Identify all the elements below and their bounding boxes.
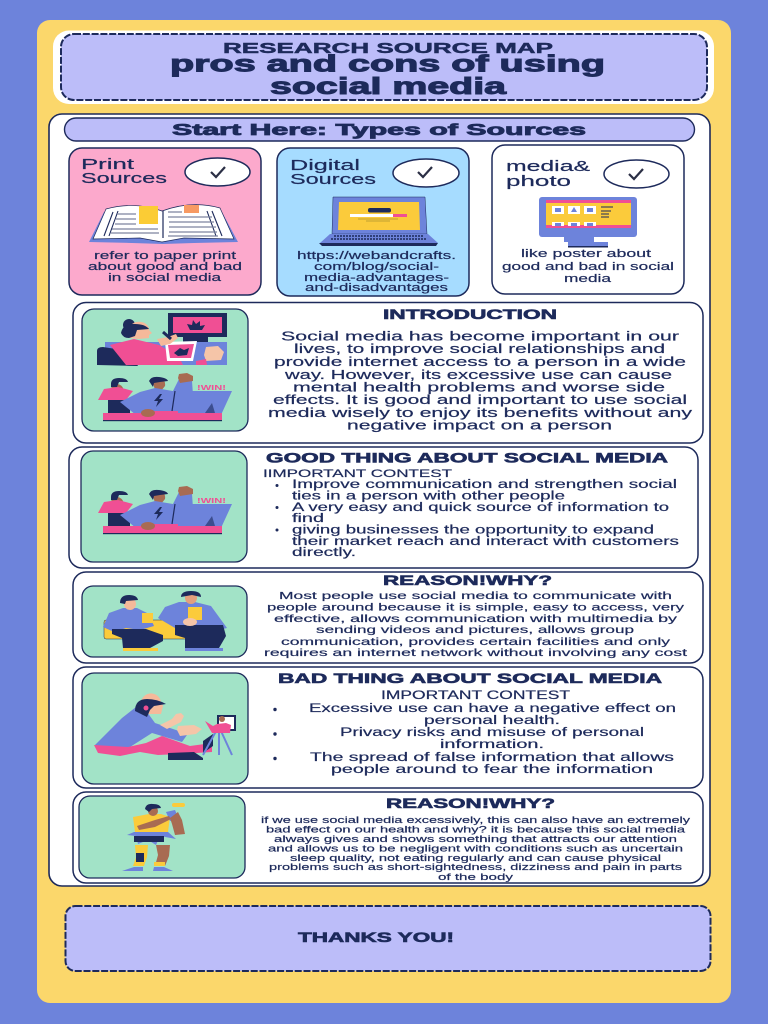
text block: introduction: lives, to improve social relationships and	[294, 341, 665, 356]
footer banner: thanks	[66, 906, 710, 971]
card text: digital	[297, 250, 456, 294]
card title: digital sources: Sources	[290, 172, 376, 188]
bullet list: good things: A very easy and quick source of information to	[292, 502, 669, 514]
panel: reason why 1	[73, 572, 703, 663]
icon: open book	[89, 205, 238, 244]
text block: reason why 2: sleep quality, not eating regularly and can cause physical	[290, 853, 661, 864]
footer banner: thanks: THANKS YOU!	[298, 930, 454, 945]
card title: media and photo: photo	[506, 174, 571, 190]
card text: digital: https://webandcrafts.	[297, 250, 456, 262]
subheading: important contest: IIMPORTANT CONTEST	[263, 468, 452, 480]
card title: media and photo	[506, 159, 591, 190]
card title: print sources: Print	[81, 157, 134, 173]
text block: introduction: provide internet access to a person in a wide	[274, 354, 686, 369]
panel: reason why 2	[73, 792, 703, 883]
title: social media: social media	[270, 73, 506, 99]
card text: digital: and-disadvantages	[305, 282, 449, 294]
checkbox: digital	[393, 159, 459, 187]
text block: reason why 1: requires an internet network without involving any cost	[264, 647, 687, 659]
text block: introduction: mental health problems and worse side	[293, 380, 665, 394]
text block: reason why 1: Most people use social media to communicate with	[279, 590, 672, 602]
text block: reason why 1	[264, 590, 687, 659]
bullet list: good things: giving businesses the opportunity to expand	[292, 524, 654, 536]
illustration: gamers at computer: !WIN!	[197, 498, 226, 505]
illustration: designer and gamers	[82, 309, 248, 431]
text block: introduction: effects. It is good and important to use social	[273, 392, 687, 407]
bullet list: bad things: people around to fear the information	[331, 764, 653, 776]
bullet list: good things: ties in a person with other people	[292, 490, 565, 502]
text block: reason why 2: of the body	[438, 872, 513, 883]
text block: introduction: media wisely to enjoy its benefits without any	[268, 405, 693, 420]
icon: monitor	[539, 197, 637, 248]
title: pros and cons: pros and cons of using	[170, 50, 605, 76]
card text: print: about good and bad	[88, 261, 242, 273]
bullet list: bad things: information.	[440, 739, 544, 751]
card text: digital: media-advantages-	[304, 272, 450, 284]
illustration: person with phone	[79, 796, 245, 878]
bullet list: good things: find	[292, 513, 324, 525]
checkbox: print	[185, 158, 250, 186]
heading pill: types of sources: Start Here: Types of Sources	[172, 122, 586, 139]
heading: good thing: GOOD THING ABOUT SOCIAL MEDIA	[266, 450, 668, 466]
card title: print sources: Sources	[81, 171, 167, 187]
bullet list: bad things: The spread of false information that allows	[310, 752, 674, 764]
main white panel	[49, 114, 710, 886]
illustration: person filming on tripod	[82, 673, 248, 784]
card title: digital sources: Digital	[290, 158, 360, 174]
card: print sources	[69, 148, 261, 295]
text block: introduction: way. However, its excessive use can cause	[283, 367, 672, 382]
card text: media: media	[564, 273, 612, 285]
bullet list: good things: their market reach and interact with customers	[292, 536, 679, 548]
title: research source map: RESEARCH SOURCE MAP	[223, 41, 554, 57]
heading: reason why: REASON!WHY?	[386, 796, 555, 811]
text block: reason why 2: problems such as short-sightedness, dizziness and pain in parts	[269, 862, 682, 873]
checkbox: media	[604, 160, 669, 188]
text block: introduction: negative impact on a person	[347, 418, 612, 432]
card text: media: good and bad in social	[502, 261, 674, 273]
card: media and photo	[492, 145, 684, 294]
text block: reason why 1: effective, allows communication with multimedia by	[274, 613, 678, 625]
panel: introduction	[73, 302, 703, 443]
bullet list: good things: Improve communication and strengthen social	[292, 479, 677, 491]
text block: reason why 2	[261, 815, 690, 883]
card: digital sources	[277, 148, 469, 296]
bullet list: bad things: personal health.	[424, 715, 560, 727]
card text: print: refer to paper print	[94, 250, 236, 262]
card text: print	[88, 250, 242, 284]
card text: print: in social media	[108, 272, 222, 284]
card text: media	[502, 248, 674, 285]
illustration: designer and gamers: !WIN!	[197, 385, 226, 392]
bullet list: good things: directly.	[292, 547, 356, 559]
heading: introduction: INTRODUCTION	[383, 307, 557, 322]
panel: bad thing about social media	[73, 667, 703, 788]
text block: reason why 2: if we use social media excessively, this can also have an extremely	[261, 815, 690, 826]
heading: bad thing: BAD THING ABOUT SOCIAL MEDIA	[278, 671, 662, 686]
bullet list: good things	[276, 479, 679, 559]
illustration: gamers at computer	[81, 451, 247, 562]
text block: reason why 2: and allows us to be negligent with conditions such as uncertain	[268, 844, 683, 854]
card title: media and photo: media&	[506, 159, 591, 175]
icon: laptop	[319, 197, 438, 246]
bullet list: bad things: Excessive use can have a negative effect on	[309, 703, 676, 715]
bullet list: bad things	[273, 703, 676, 776]
text block: introduction	[268, 328, 693, 432]
text block: introduction: Social media has become important in our	[281, 328, 680, 344]
subheading: important contest: IMPORTANT CONTEST	[381, 690, 570, 702]
text block: reason why 2: bad effect on our health and why? it is because this social media	[266, 824, 686, 836]
title banner	[53, 30, 714, 104]
heading pill: types of sources	[64, 118, 694, 141]
card title: print sources	[81, 157, 167, 187]
text block: reason why 1: sending videos and pictures, allows group	[316, 624, 634, 636]
text block: reason why 1: communication, provides certain facilities and only	[281, 636, 671, 648]
illustration: two people on couch	[82, 586, 247, 657]
card title: digital sources	[290, 158, 376, 188]
card text: digital: com/blog/social-	[314, 261, 440, 273]
bullet list: bad things: Privacy risks and misuse of personal	[340, 727, 644, 739]
panel: good thing about social media	[69, 447, 698, 568]
heading: reason why: REASON!WHY?	[383, 573, 552, 588]
text block: reason why 2: always gives and shows something that attracts our attention	[274, 834, 677, 845]
card text: media: like poster about	[521, 248, 651, 260]
text block: reason why 1: people around because it is simple, easy to access, very	[267, 602, 685, 614]
